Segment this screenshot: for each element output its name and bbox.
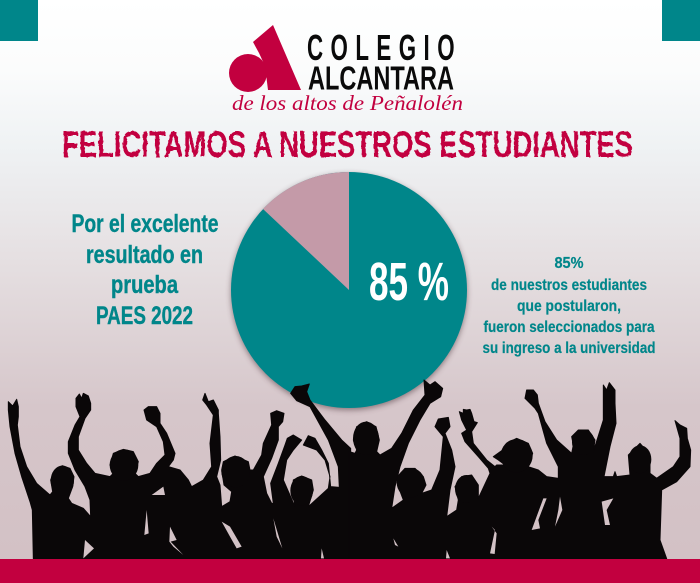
text block: right message: de nuestros estudiantes <box>491 277 647 294</box>
pie shadow <box>231 174 467 410</box>
gaps between figures <box>83 487 613 558</box>
logo wordmark line 1: COLEGIO <box>307 29 455 68</box>
text block: left message: resultado en <box>86 241 203 269</box>
crowd: left half <box>8 384 351 559</box>
pie slice: 85% teal <box>231 172 467 408</box>
pie chart: 85 percent <box>231 172 467 410</box>
text block: right message: que postularon, <box>517 298 621 315</box>
text block: right message <box>482 255 656 357</box>
top right corner block <box>662 0 700 41</box>
silhouettes of celebrating students <box>8 380 691 559</box>
icon: logo A mark <box>229 25 301 92</box>
text block: left message <box>72 210 219 330</box>
logo tagline: de los altos de Peñalolén <box>232 91 463 115</box>
top left corner block <box>0 0 38 41</box>
logo: Colegio Alcantara <box>229 25 463 115</box>
text block: right message: 85% <box>554 255 584 272</box>
text block: right message: fueron seleccionados para <box>484 319 655 336</box>
rounded heads, right half <box>353 422 651 503</box>
text block: left message: PAES 2022 <box>96 302 193 330</box>
text block: left message: Por el excelente <box>72 210 219 238</box>
pie slice: 15% pink <box>263 172 349 290</box>
crowd: right half <box>349 380 691 559</box>
bottom crimson bar <box>0 559 700 583</box>
pie label: 85 % <box>369 252 449 312</box>
rounded heads, left half <box>51 449 313 505</box>
text block: left message: prueba <box>111 271 179 299</box>
logo wordmark line 2: ALCANTARA <box>308 60 454 96</box>
text block: right message: su ingreso a la universidad <box>482 340 656 357</box>
